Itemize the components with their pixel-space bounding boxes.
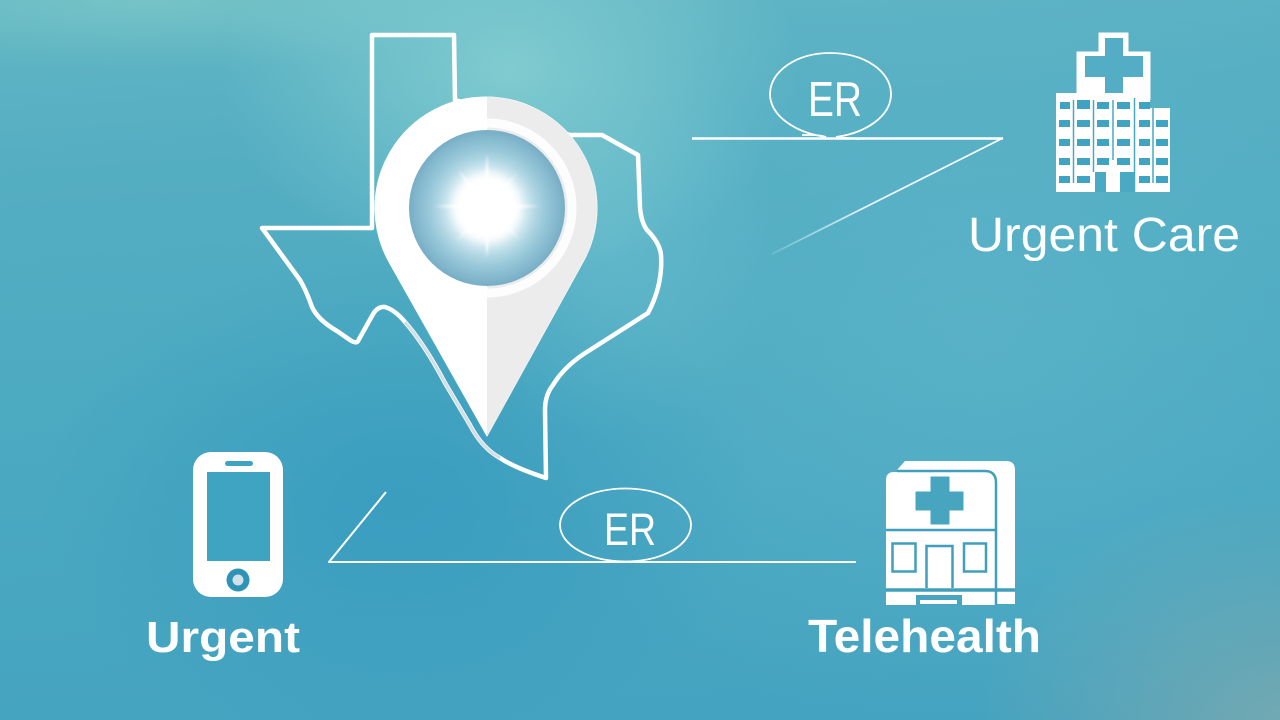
ER label: ER [604,504,656,555]
ER label: ER [808,73,862,127]
pin body [375,97,597,436]
clinic right window [964,544,986,572]
clinic roofline [886,529,995,531]
phone button [226,568,250,592]
building block [1056,93,1170,192]
teal cross [1085,38,1143,95]
hospital cross sign [1077,33,1150,100]
map pin [375,97,597,436]
building windows [1059,100,1168,183]
icon: clinic [886,461,1015,605]
top connector with ER badge [692,53,1003,254]
phone speaker [225,461,253,466]
ER ellipse [770,53,891,139]
building entrance [1095,172,1134,192]
Texas outline [262,35,661,478]
icon: hospital building [1056,33,1170,192]
label: Telehealth: Telehealth [808,610,1041,662]
ER ellipse [560,488,691,562]
clinic base [886,588,1015,592]
clinic left window [892,544,916,572]
label: Urgent: Urgent [146,613,300,662]
phone screen [207,472,270,561]
clinic step [916,595,962,605]
bottom connector with ER badge [329,488,856,562]
connector line [692,137,1003,140]
clinic door [926,546,952,588]
connector diagonal [772,138,1003,254]
phone body [193,452,283,597]
clinic divider stroke [897,471,996,605]
pin lens [409,123,572,293]
clinic cross [916,477,963,524]
building column gaps [1074,98,1153,192]
clinic front outline [886,472,995,605]
clinic back wall [897,461,1015,604]
pin shaded half [487,97,597,436]
Gulf coast tint [405,322,500,458]
label: Urgent Care: Urgent Care [968,209,1240,262]
connector lines [329,492,856,562]
icon: smartphone [193,452,283,597]
